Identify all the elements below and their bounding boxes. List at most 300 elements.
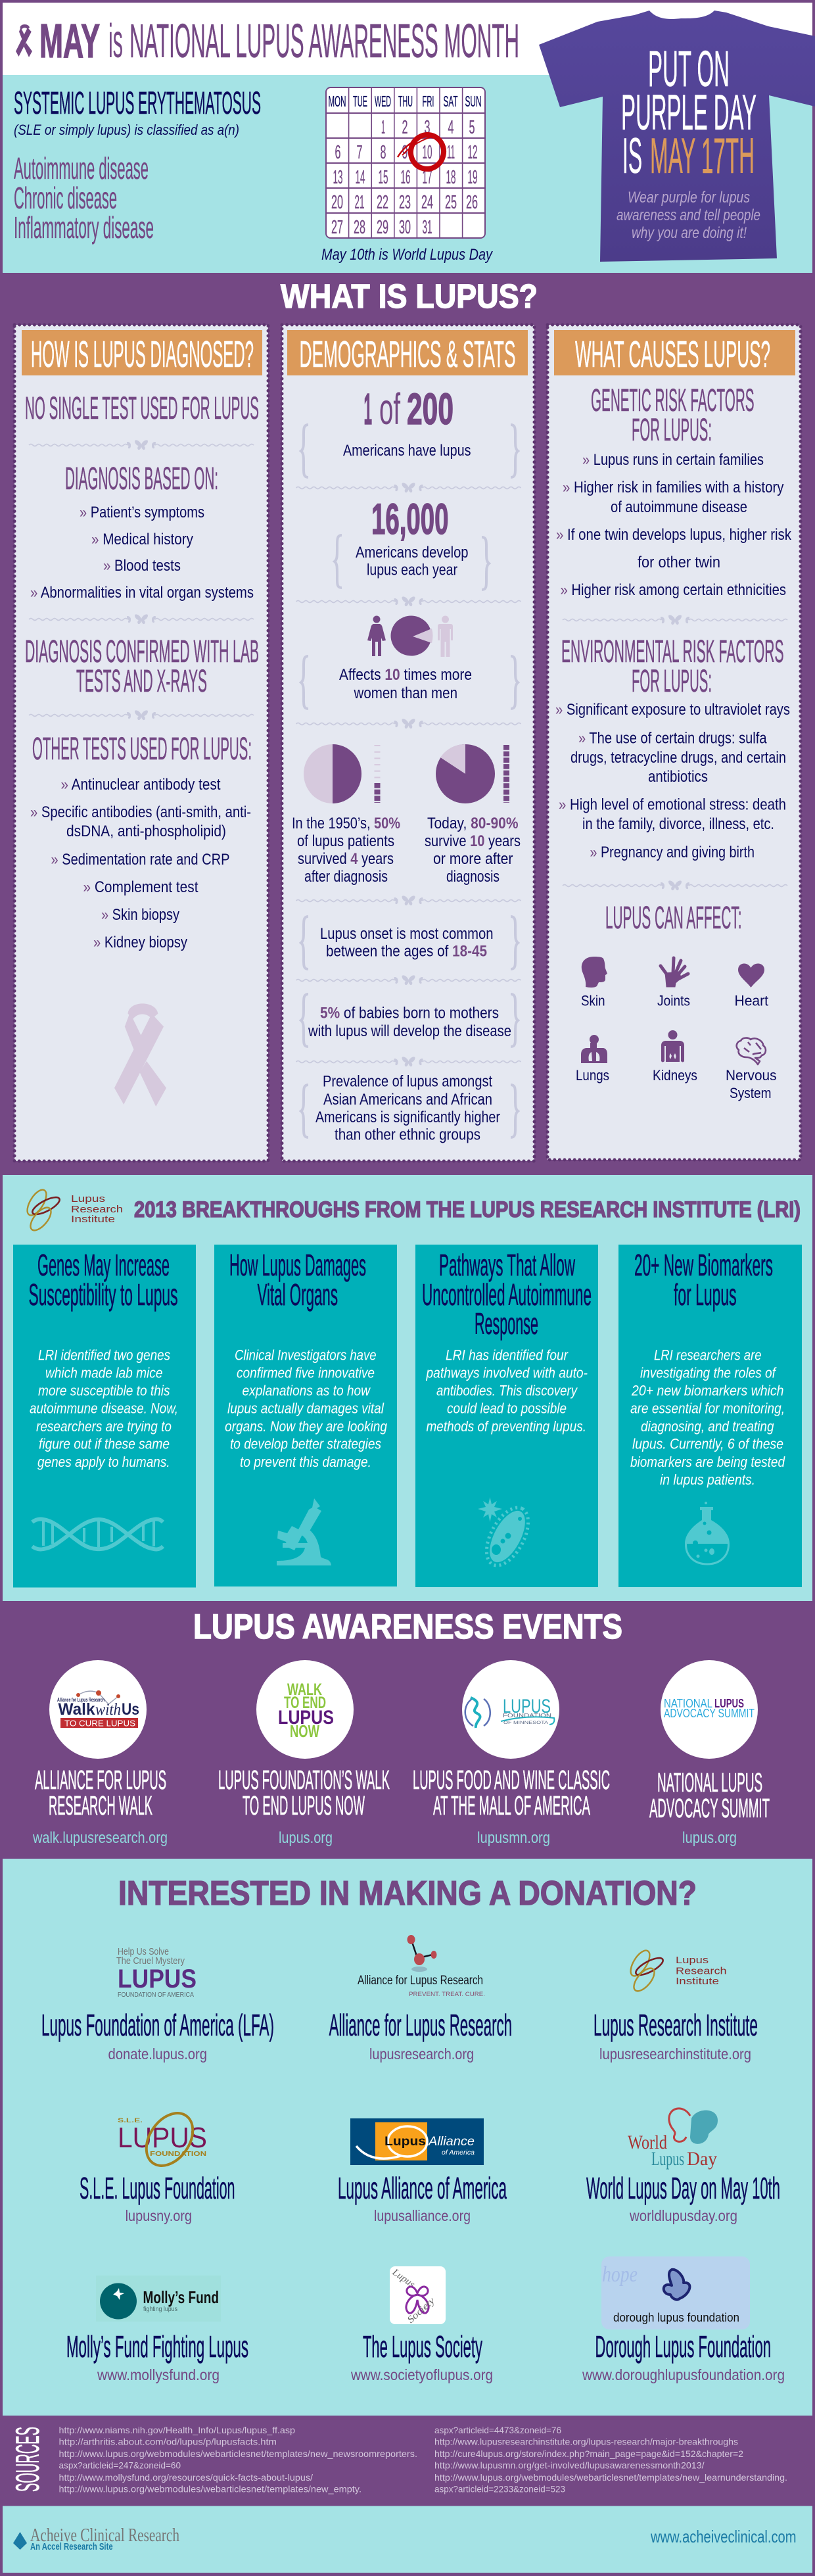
- list: genetic risks: » Lupus runs in certain families: [582, 451, 764, 469]
- subheading: environmental risk: [561, 634, 783, 699]
- shirt message: [617, 189, 760, 242]
- header white band: [0, 0, 815, 75]
- source list: right column: aspx?articleid=4473&zoneid=76: [434, 2425, 561, 2435]
- panel: how is lupus diagnosed: DIAGNOSIS BASED ON:: [65, 462, 218, 496]
- label: nervous system: Nervous: [726, 1067, 777, 1084]
- list: environmental risks: [555, 701, 790, 861]
- stat: 16,000: [335, 494, 489, 590]
- stat: 1 of 200: Americans have lupus: [343, 442, 471, 460]
- logo: lupus alliance: Alliance: [428, 2135, 475, 2149]
- calendar: WED: [375, 93, 391, 110]
- logo: lupus alliance: [350, 2118, 484, 2165]
- card title: [422, 1248, 592, 1341]
- icon: microscope: [277, 1498, 331, 1565]
- icon: woman: [367, 615, 386, 656]
- panel header: [287, 330, 528, 375]
- infographic: LUPUS FOUNDATION’S WALK: [218, 1765, 390, 1795]
- chart: survival in 1950s: In the 1950’s, 50%: [292, 815, 400, 832]
- stat: 1 of 200: 200: [407, 385, 454, 434]
- logo: walk with us: Us: [122, 1700, 139, 1719]
- logo: lupus foundation of minnesota: OF MINNESOTA: [503, 1721, 548, 1725]
- title: [16, 15, 519, 68]
- source list: right column: http://www.lupus.org/webmodules/webarticlesnet/templates/new_learnunderstanding.: [434, 2472, 787, 2483]
- source list: left column: http://www.lupus.org/webmodules/webarticlesnet/templates/new_empty.: [59, 2484, 361, 2494]
- chart: women vs men: women than men: [354, 684, 457, 702]
- card title: [229, 1248, 366, 1312]
- card title: for Lupus: [674, 1277, 737, 1312]
- list: diagnosis criteria: » Medical history: [91, 531, 193, 548]
- section: breakthroughs background: [3, 1175, 812, 1601]
- label: skin: Skin: [581, 993, 605, 1009]
- calendar: 5: [469, 117, 475, 138]
- calendar: 2: [402, 117, 408, 138]
- heading: interested in making a donation: INTERESTED IN MAKING A DONATION?: [118, 1874, 697, 1913]
- logo: lfa: The Cruel Mystery: [116, 1955, 185, 1967]
- shirt headline: [621, 41, 757, 184]
- calendar: 17: [422, 167, 432, 188]
- card body: to prevent this damage.: [240, 1454, 371, 1470]
- infographic: Autoimmune disease: [14, 151, 149, 185]
- list: other tests: » Kidney biopsy: [93, 934, 187, 951]
- list: environmental risks: » Pregnancy and giving birth: [590, 844, 755, 861]
- footer band: [3, 2506, 812, 2573]
- card body: [630, 1347, 785, 1488]
- logo: lfa: Help Us Solve: [118, 1946, 169, 1957]
- chart: survival today: or more after: [433, 850, 513, 868]
- card body: genes apply to humans.: [37, 1454, 170, 1470]
- panel: what causes lupus: [547, 325, 801, 1160]
- logo: lri: [627, 1947, 727, 1995]
- logo: lupus foundation of minnesota: LUPUS: [503, 1696, 551, 1717]
- infographic: Lupus Alliance of America: [338, 2171, 507, 2205]
- stat: 16,000: Americans develop: [356, 544, 468, 561]
- chart: survival today: Today, 80-90%: [427, 815, 518, 832]
- donation: lupus alliance of america: [338, 2118, 507, 2224]
- stat: prevalence: Americans is significantly higher: [315, 1109, 500, 1126]
- icon: brain: [737, 1038, 766, 1064]
- chart: survival in 1950s: [292, 744, 400, 886]
- card body: methods of preventing lupus.: [426, 1418, 586, 1435]
- logo: lri: Research: [676, 1966, 727, 1976]
- stat: prevalence: Asian Americans and African: [323, 1091, 492, 1109]
- card body: which made lab mice: [45, 1365, 163, 1381]
- icon: awareness ribbon: [16, 24, 32, 57]
- logo: walk with us: TO CURE LUPUS: [64, 1719, 135, 1728]
- infographic: ALLIANCE FOR LUPUS: [35, 1765, 166, 1795]
- infographic: DIAGNOSIS CONFIRMED WITH LAB: [25, 634, 259, 669]
- source list: right column: aspx?articleid=2233&zoneid=523: [434, 2484, 565, 2494]
- shirt message: awareness and tell people: [617, 206, 760, 224]
- section: lupus awareness events background: [0, 1601, 815, 1859]
- card body: researchers are trying to: [36, 1418, 172, 1435]
- stat: babies: 5% of babies born to mothers: [320, 1005, 499, 1022]
- calendar: 27: [331, 217, 343, 238]
- donation: the lupus society: [350, 2266, 493, 2383]
- logo: advocacy summit: NATIONAL: [664, 1697, 712, 1710]
- text block: definition: (SLE or simply lupus) is classified as a(n): [14, 122, 239, 138]
- logo: world lupus day: World: [628, 2132, 667, 2153]
- donation: alliance for lupus research: [329, 1935, 512, 2063]
- subheading: diagnosis confirmed: TESTS AND X-RAYS: [76, 664, 207, 699]
- infographic: SYSTEMIC LUPUS ERYTHEMATOSUS: [14, 86, 261, 121]
- calendar: 10: [422, 142, 432, 163]
- event url: walk.lupusresearch.org: [32, 1829, 168, 1847]
- section: what is lupus background: [0, 273, 815, 1175]
- stat: onset ages: between the ages of 18-45: [326, 943, 487, 961]
- event title: [218, 1765, 390, 1821]
- chart: survival today: diagnosis: [446, 868, 500, 886]
- stat: babies: with lupus will develop the disease: [308, 1022, 511, 1040]
- stat: onset ages: Lupus onset is most common: [320, 925, 493, 943]
- card body: 20+ new biomarkers which: [631, 1383, 783, 1399]
- card body: lupus actually damages vital: [227, 1400, 384, 1416]
- card body: biomarkers are being tested: [630, 1454, 785, 1470]
- calendar: 25: [445, 192, 457, 213]
- title: is: [108, 15, 123, 68]
- logo: mollys fund: fighting lupus: [143, 2306, 177, 2313]
- calendar: THU: [398, 93, 413, 110]
- list: environmental risks: antibiotics: [648, 768, 708, 786]
- stat: prevalence: Prevalence of lupus amongst: [323, 1072, 492, 1090]
- calendar: 24: [421, 192, 433, 213]
- logo: lfa: [116, 1946, 197, 1999]
- organization url: lupusresearchinstitute.org: [599, 2045, 751, 2063]
- donation: mollys fund: [66, 2276, 248, 2383]
- logo: dorough: [601, 2256, 750, 2329]
- list: other tests: » Specific antibodies (anti-smith, anti-: [30, 803, 251, 821]
- logo: lupus society: [390, 2266, 446, 2326]
- list: environmental risks: » The use of certain drugs: sulfa: [578, 730, 767, 747]
- logo: walk with us: [49, 1660, 147, 1759]
- shirt message: why you are doing it!: [632, 224, 747, 242]
- calendar: 8: [380, 142, 386, 163]
- organization url: lupusalliance.org: [374, 2207, 471, 2224]
- infographic: Molly’s Fund Fighting Lupus: [66, 2329, 248, 2364]
- logo: sle: [118, 2105, 207, 2174]
- card body: [30, 1347, 178, 1470]
- list: diagnosis criteria: [30, 504, 254, 602]
- icon: large ribbon: [114, 1003, 166, 1107]
- list: diagnosis criteria: » Abnormalities in vital organ systems: [30, 584, 254, 602]
- logo: lfa: FOUNDATION OF AMERICA: [118, 1992, 194, 1999]
- organization url: lupusresearch.org: [369, 2045, 474, 2063]
- logo: dorough: hope: [602, 2262, 638, 2287]
- section: sources: [0, 2416, 815, 2506]
- icon: dna: [32, 1519, 163, 1549]
- logo: lupus foundation of minnesota: FOUNDATION: [503, 1713, 551, 1719]
- logo: advocacy summit: [661, 1660, 758, 1759]
- logo: lri: Lupus: [676, 1955, 709, 1966]
- caption: world lupus day: May 10th is World Lupus Day: [321, 246, 494, 264]
- list: other tests: » Skin biopsy: [101, 906, 179, 924]
- logo: lupus research institute: Lupus: [71, 1193, 105, 1205]
- panel: how is lupus diagnosed: [14, 325, 268, 1161]
- card body: could lead to possible: [447, 1400, 567, 1416]
- intro teal band: [0, 75, 815, 273]
- calendar: 31: [422, 217, 432, 238]
- icon: lungs: [581, 1035, 607, 1063]
- calendar: 30: [399, 217, 411, 238]
- source list: left column: http://www.lupus.org/webmodules/webarticlesnet/templates/new_newsroomreporters.: [59, 2448, 417, 2459]
- card title: Vital Organs: [258, 1277, 338, 1312]
- card body: LRI identified two genes: [38, 1347, 170, 1363]
- subheading: diagnosis confirmed: [25, 634, 259, 699]
- list: other tests: dsDNA, anti-phospholipid): [66, 823, 226, 840]
- logo: alliance: Alliance for Lupus Research: [358, 1974, 483, 1988]
- calendar: 13: [333, 167, 343, 188]
- label: nervous system: System: [730, 1085, 772, 1101]
- icon: kidneys: [661, 1030, 684, 1062]
- logo: lupus alliance: Lupus: [384, 2135, 426, 2149]
- infographic: Lupus Foundation of America (LFA): [41, 2008, 274, 2042]
- card body: pathways involved with auto-: [426, 1365, 588, 1381]
- logo: lupus society: Lupus: [390, 2267, 417, 2290]
- organization url: www.societyoflupus.org: [350, 2366, 493, 2383]
- logo: alliance: PREVENT. TREAT. CURE.: [409, 1991, 485, 1997]
- card title: Pathways That Allow: [439, 1248, 575, 1282]
- infographic: S.L.E. Lupus Foundation: [80, 2171, 235, 2205]
- text block: disease classifications: [14, 151, 154, 245]
- event url: lupus.org: [682, 1829, 737, 1847]
- logo: sle: LUPUS: [118, 2122, 207, 2154]
- icon: flask: [685, 1502, 730, 1564]
- calendar: 18: [446, 167, 456, 188]
- infographic: Alliance for Lupus Research: [329, 2008, 512, 2042]
- stat: onset ages: [301, 917, 518, 969]
- calendar: 4: [448, 117, 454, 138]
- icon: head: [582, 957, 607, 988]
- list: genetic risks: » Higher risk in families with a history: [563, 479, 783, 496]
- card body: organs. Now they are looking: [225, 1418, 388, 1435]
- event title: AT THE MALL OF AMERICA: [433, 1790, 590, 1821]
- logo: walk to end lupus now: LUPUS: [278, 1707, 334, 1729]
- card body: [225, 1347, 388, 1470]
- logo: acheive clinical research: [13, 2525, 179, 2552]
- event: alliance for lupus research walk: [32, 1660, 168, 1847]
- text block: disease classifications: Chronic disease: [14, 181, 117, 215]
- logo: lupus society: Society: [406, 2295, 437, 2326]
- calendar: 26: [466, 192, 478, 213]
- label: kidneys: Kidneys: [653, 1067, 697, 1084]
- card title: Genes May Increase: [37, 1248, 170, 1282]
- calendar: TUE: [353, 93, 367, 110]
- calendar: [326, 87, 485, 238]
- list: genetic risks: of autoimmune disease: [611, 498, 747, 516]
- list: other tests: [30, 776, 251, 951]
- logo: alliance: [358, 1935, 485, 1997]
- chart: survival in 1950s: of lupus patients: [297, 832, 394, 850]
- panel: demographics and stats: [282, 325, 534, 1161]
- subheading: genetic risk: [591, 383, 755, 448]
- logo: dorough: dorough lupus foundation: [613, 2311, 739, 2324]
- logo: acheive clinical research: Acheive Clinical Research: [30, 2525, 179, 2546]
- source list: left column: http://arthritis.about.com/od/lupus/p/lupusfacts.htm: [59, 2437, 277, 2447]
- icon: red circle on May 10: [398, 131, 447, 172]
- stat: 1 of 200: 1: [364, 385, 372, 434]
- label: joints: Joints: [657, 993, 690, 1009]
- card body: to develop better strategies: [230, 1436, 381, 1452]
- organization url: www.doroughlupusfoundation.org: [582, 2366, 785, 2383]
- card body: figure out if these same: [39, 1436, 170, 1452]
- pie: 10 to 1: [390, 615, 432, 656]
- infographic: HOW IS LUPUS DIAGNOSED?: [31, 333, 254, 375]
- event url: lupus.org: [279, 1829, 333, 1847]
- chart: survival in 1950s: survived 4 years: [298, 850, 394, 868]
- calendar: 12: [468, 142, 477, 163]
- calendar: 14: [355, 167, 365, 188]
- source list: left column: http://www.niams.nih.gov/Health_Info/Lupus/lupus_ff.asp: [59, 2425, 295, 2435]
- organization url: donate.lupus.org: [108, 2045, 207, 2063]
- icon: man: [438, 615, 453, 657]
- card body: investigating the roles of: [640, 1365, 777, 1381]
- stat: 16,000: 16,000: [371, 494, 448, 543]
- card body: [426, 1347, 588, 1435]
- label: nervous system: [726, 1067, 777, 1101]
- card: pathways: [415, 1245, 598, 1587]
- logo: lri: Institute: [676, 1976, 719, 1987]
- logo: walk to end lupus now: [256, 1660, 354, 1759]
- donation: dorough lupus foundation: [582, 2256, 785, 2383]
- event: national lupus advocacy summit: [649, 1660, 770, 1847]
- calendar: SAT: [443, 93, 457, 110]
- list: diagnosis criteria: » Patient’s symptoms: [80, 504, 204, 521]
- logo: sle: FOUNDATION: [150, 2151, 206, 2158]
- chart: women vs men: Affects 10 times more: [339, 666, 472, 684]
- stat: 16,000: lupus each year: [367, 561, 457, 579]
- calendar: 7: [356, 142, 363, 163]
- logo: sle: S.L.E.: [118, 2117, 143, 2124]
- t-shirt panel: [539, 11, 815, 262]
- donation: world lupus day: [586, 2109, 780, 2224]
- heading: what is lupus: WHAT IS LUPUS?: [281, 277, 538, 315]
- chart: survival today: survive 10 years: [425, 832, 521, 850]
- section: donation background: [3, 1859, 812, 2416]
- shirt message: Wear purple for lupus: [628, 189, 750, 206]
- logo: lfa: LUPUS: [118, 1965, 197, 1993]
- infographic: Inflammatory disease: [14, 210, 154, 245]
- infographic: NO SINGLE TEST USED FOR LUPUS: [25, 391, 259, 426]
- card: biomarkers: [618, 1245, 802, 1587]
- stat: 1 of 200: [301, 385, 518, 477]
- source list: right column: http://cure4lupus.org/store/index.php?main_page=page&id=152&chapter=2: [434, 2448, 743, 2459]
- logo: world lupus day: [628, 2109, 718, 2170]
- logo: acheive clinical research: An Accel Research Site: [30, 2541, 113, 2552]
- chart: survival in 1950s: after diagnosis: [304, 868, 388, 886]
- event title: [35, 1765, 166, 1821]
- list: other tests: » Complement test: [83, 878, 198, 896]
- calendar: 6: [335, 142, 340, 163]
- list: other tests: » Antinuclear antibody test: [60, 776, 221, 794]
- label: heart: Heart: [735, 993, 768, 1009]
- calendar: 9: [402, 142, 408, 163]
- stat: prevalence: than other ethnic groups: [335, 1126, 480, 1144]
- donation: the lupus society: The Lupus Society: [363, 2329, 482, 2364]
- logo: walk with us: Walk: [58, 1700, 95, 1719]
- icon: bacteria: [478, 1497, 537, 1572]
- logo: lupus research institute: [24, 1187, 123, 1234]
- source list: left column: [59, 2425, 417, 2494]
- card body: lupus. Currently, 6 of these: [632, 1436, 783, 1452]
- icon: heart: [738, 964, 764, 988]
- logo: world lupus day: Day: [687, 2148, 717, 2170]
- panel header: [22, 330, 262, 375]
- list: environmental risks: in the family, divorce, illness, etc.: [582, 815, 774, 833]
- logo: mollys fund: Molly’s Fund: [143, 2287, 219, 2307]
- event: lupus food and wine classic: [413, 1660, 610, 1847]
- logo: mollys fund: [96, 2276, 221, 2322]
- logo: walk to end lupus now: WALK: [287, 1681, 322, 1699]
- card title: Response: [475, 1306, 538, 1341]
- card: organs: How Lupus Damages: [229, 1248, 366, 1282]
- card: genes: [13, 1245, 196, 1587]
- logo: walk to end lupus now: NOW: [290, 1721, 319, 1741]
- stat: prevalence: [301, 1072, 518, 1144]
- card body: diagnosing, and treating: [641, 1418, 774, 1435]
- card body: explanations as to how: [242, 1383, 371, 1399]
- card body: LRI has identified four: [446, 1347, 569, 1363]
- event title: TO END LUPUS NOW: [243, 1790, 365, 1821]
- organization url: lupusny.org: [126, 2207, 192, 2224]
- icon: hand: [661, 958, 688, 987]
- logo: lupus alliance: of America: [442, 2149, 475, 2157]
- calendar: 28: [354, 217, 365, 238]
- logo: walk to end lupus now: TO END: [284, 1694, 326, 1712]
- calendar: FRI: [422, 93, 434, 110]
- event url: lupusmn.org: [477, 1829, 550, 1847]
- event title: RESEARCH WALK: [49, 1790, 152, 1821]
- calendar: SUN: [465, 93, 481, 110]
- event title: [413, 1765, 610, 1821]
- donation: lupus research institute: [594, 1947, 758, 2063]
- title: MAY: [39, 15, 100, 68]
- card title: [634, 1248, 773, 1312]
- calendar: 22: [377, 192, 388, 213]
- label: lungs: Lungs: [576, 1067, 609, 1084]
- logo: advocacy summit: ADVOCACY SUMMIT: [664, 1707, 755, 1720]
- source list: right column: [434, 2425, 787, 2494]
- list: genetic risks: for other twin: [638, 554, 720, 571]
- calendar: 11: [447, 142, 455, 163]
- chart: survival today: [425, 744, 521, 886]
- card: organs: [214, 1245, 397, 1586]
- card body: Clinical Investigators have: [235, 1347, 377, 1363]
- stat: 1 of 200: of: [379, 385, 400, 434]
- logo: advocacy summit: LUPUS: [714, 1697, 744, 1710]
- chart: women vs men: [301, 615, 518, 709]
- calendar: 21: [355, 192, 364, 213]
- event title: [649, 1767, 770, 1823]
- card: genes: Susceptibility to Lupus: [29, 1277, 177, 1312]
- stat: babies: [301, 994, 518, 1047]
- logo: lupus foundation of minnesota: [462, 1660, 559, 1759]
- infographic: SOURCES: [9, 2427, 46, 2492]
- calendar: 15: [379, 167, 388, 188]
- logo: walk with us: Alliance for Lupus Research: [57, 1697, 105, 1703]
- list: other tests: » Sedimentation rate and CRP: [51, 851, 230, 869]
- heading: lupus awareness events: LUPUS AWARENESS EVENTS: [193, 1608, 622, 1646]
- list: diagnosis criteria: » Blood tests: [103, 557, 181, 575]
- card body: in lupus patients.: [660, 1471, 755, 1488]
- logo: walk with us: with: [95, 1701, 121, 1719]
- logo: world lupus day: Lupus: [651, 2148, 684, 2170]
- donation: lupus foundation of america: [41, 1946, 274, 2063]
- infographic: OTHER TESTS USED FOR LUPUS:: [32, 732, 252, 767]
- calendar: 3: [425, 117, 430, 138]
- card body: confirmed five innovative: [237, 1365, 375, 1381]
- organization url: worldlupusday.org: [629, 2207, 737, 2224]
- calendar: 19: [468, 167, 477, 188]
- card: pathways: Uncontrolled Autoimmune: [422, 1277, 592, 1312]
